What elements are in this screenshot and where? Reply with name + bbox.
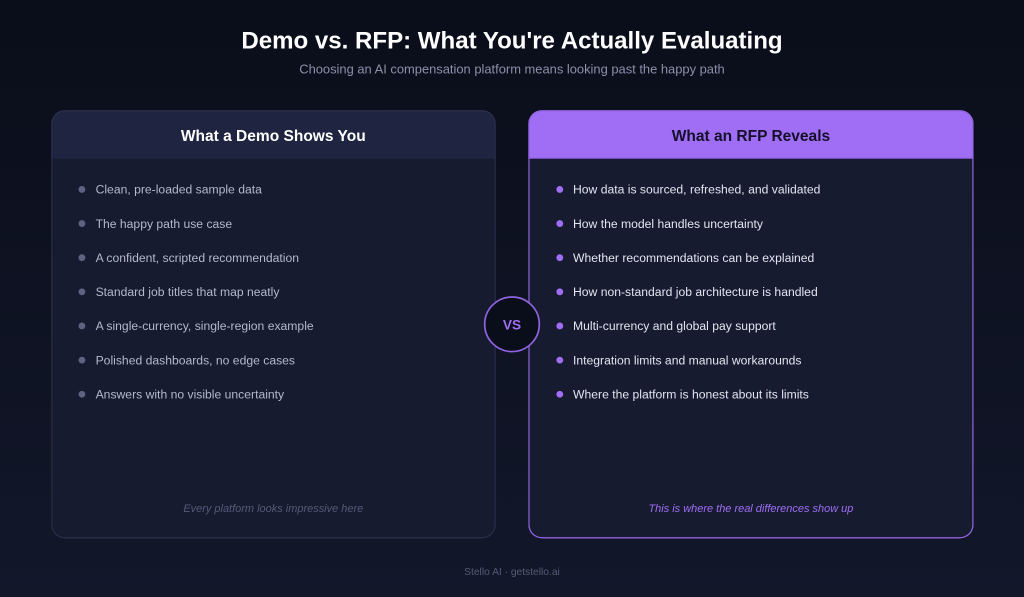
panel heading: RFP: What an RFP Reveals: [672, 127, 830, 144]
list item: integration: Integration limits and manual workarounds: [573, 354, 801, 367]
panel note: demo: Every platform looks impressive here: [183, 502, 363, 515]
list item: single currency: A single-currency, single-region example: [96, 320, 314, 333]
list item: sample data: Clean, pre-loaded sample data: [96, 183, 262, 197]
panel heading: demo: [51, 110, 496, 159]
list item: scripted recommendation: A confident, scripted recommendation: [96, 251, 299, 265]
panel border: demo: [51, 110, 496, 538]
footer: Stello AI · getstello.ai: [464, 566, 560, 578]
list item: data sourcing: How data is sourced, refreshed, and validated: [573, 183, 820, 197]
subtitle: Choosing an AI compensation platform means looking past the happy path: [299, 62, 725, 76]
list item: happy path: The happy path use case: [96, 217, 232, 231]
VS badge: VS: [503, 318, 521, 333]
list item: uncertainty: How the model handles uncertainty: [573, 217, 763, 231]
panel heading: RFP: [528, 110, 974, 159]
panel border: RFP: [528, 110, 974, 538]
list item: explainability: Whether recommendations can be explained: [573, 251, 814, 265]
list item: dashboards: Polished dashboards, no edge cases: [96, 354, 295, 367]
panel note: RFP: This is where the real differences show up: [648, 502, 853, 515]
list item: honesty: Where the platform is honest about its limits: [573, 388, 809, 401]
panel heading: demo: What a Demo Shows You: [181, 127, 366, 144]
title: Demo vs. RFP: What You're Actually Evaluating: [241, 26, 783, 54]
panel: what a demo shows: [51, 110, 496, 538]
list item: multi-currency: Multi-currency and global pay support: [573, 320, 776, 333]
list item: no uncertainty: Answers with no visible uncertainty: [96, 388, 284, 401]
list item: job architecture: How non-standard job architecture is handled: [573, 285, 818, 299]
panel: what an RFP reveals: [528, 110, 974, 538]
list item: job titles: Standard job titles that map neatly: [96, 285, 279, 299]
VS badge: [484, 296, 540, 352]
